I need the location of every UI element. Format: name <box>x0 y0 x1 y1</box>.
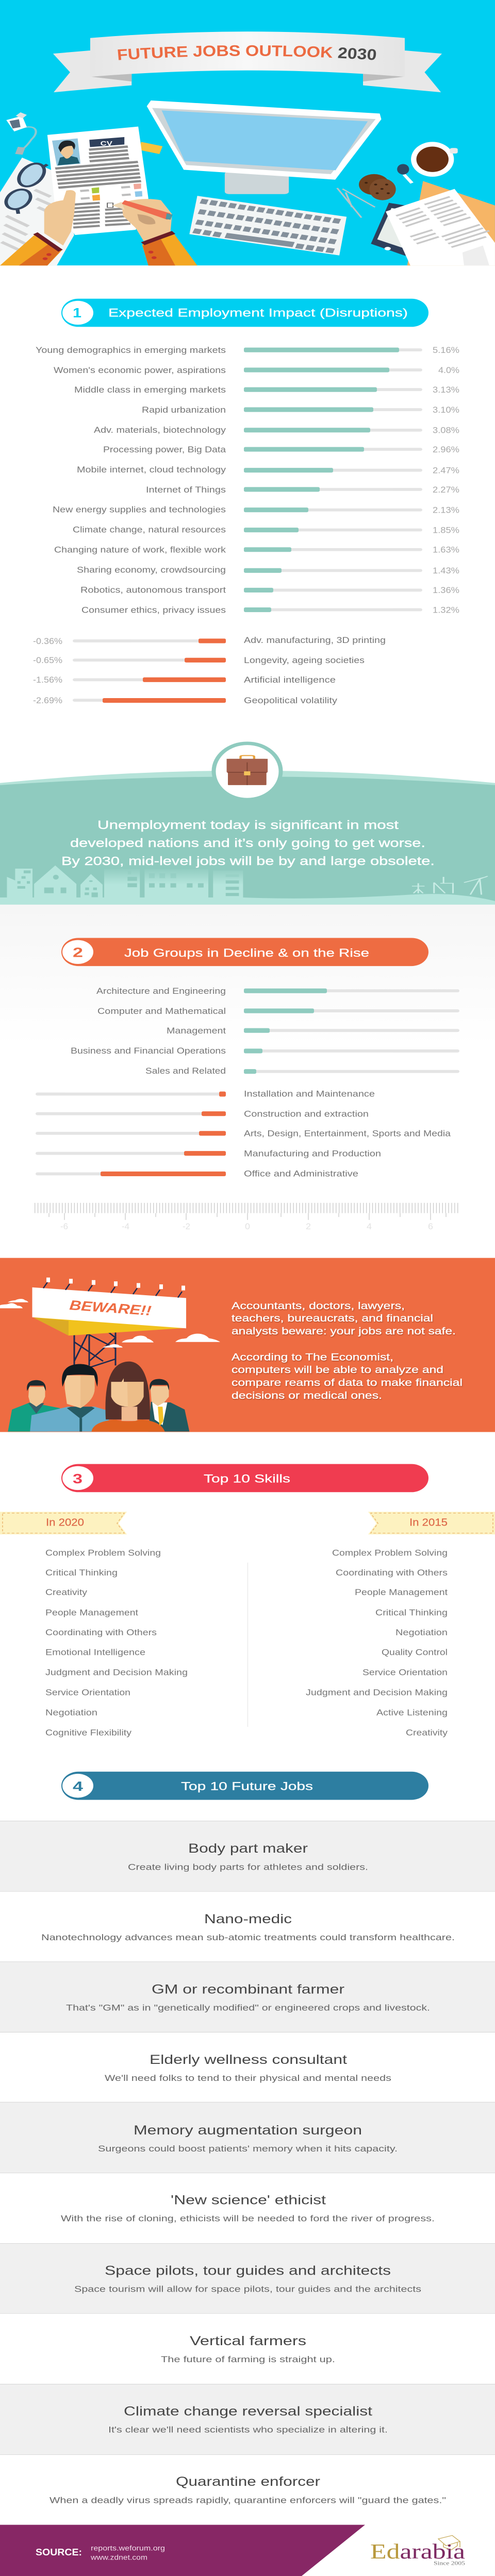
job row 3: That's "GM" as in "genetically modified" or engineered crops and livestock. <box>66 2003 430 2012</box>
bar chart: job groups in decline: Installation and Maintenance <box>244 1089 375 1098</box>
callout text: Unemployment today is significant in most <box>97 819 399 832</box>
panel: unemployment callout <box>0 741 495 905</box>
list: skills in 2020: Complex Problem Solving <box>45 1548 161 1557</box>
callout text: By 2030, mid-level jobs will be by and large obsolete. <box>61 855 435 868</box>
section heading 1: 1 <box>73 306 81 321</box>
icon: compass <box>337 188 375 217</box>
job row 2 <box>41 1911 455 1942</box>
beware text <box>232 1301 463 1401</box>
icon: CV sheet <box>47 127 148 235</box>
bar chart: negative disruptions: Longevity, ageing societies <box>244 655 365 665</box>
footer: sources: www.zdnet.com <box>90 2554 147 2562</box>
beware text: analysts beware: your jobs are not safe. <box>232 1326 456 1336</box>
beware text: Accountants, doctors, lawyers, <box>232 1301 405 1312</box>
list: skills in 2015 <box>306 1548 448 1737</box>
beware text: decisions or medical ones. <box>232 1391 382 1401</box>
bar chart: positive disruptions: Climate change, natural resources <box>73 524 226 534</box>
chart axis ruler <box>35 1208 459 1231</box>
banner tails <box>53 50 442 92</box>
bar chart: negative disruptions: Artificial intelligence <box>244 675 336 685</box>
chart axis ruler: -2 <box>183 1222 190 1231</box>
icon: coffee cup <box>411 142 458 177</box>
bar chart: positive disruptions: 1.32% <box>433 605 459 615</box>
bar chart: positive disruptions: 5.16% <box>433 345 459 355</box>
bar chart: positive disruptions <box>36 345 459 615</box>
list: skills in 2015: Active Listening <box>376 1707 448 1717</box>
job row 5: Surgeons could boost patients' memory when it hits capacity. <box>98 2144 398 2154</box>
job row 6: 'New science' ethicist <box>171 2193 326 2207</box>
bar chart: positive disruptions: Changing nature of work, flexible work <box>54 545 226 554</box>
bar chart: job groups in decline: Arts, Design, Entertainment, Sports and Media <box>244 1128 451 1138</box>
title: FUTURE JOBS OUTLOOK 2030 <box>118 45 376 60</box>
icon: glasses <box>2 162 49 214</box>
job row 3: GM or recombinant farmer <box>152 1982 344 1996</box>
bar chart: positive disruptions: 3.08% <box>433 425 459 435</box>
job row 9: It's clear we'll need scientists who specialize in altering it. <box>108 2425 388 2434</box>
illustration: town skyline <box>0 866 495 905</box>
section heading 3 <box>61 1464 428 1492</box>
job row 1: Create living body parts for athletes and soldiers. <box>128 1862 368 1872</box>
illustration: group of people <box>8 1362 189 1432</box>
bar chart: positive disruptions: 4.0% <box>438 365 459 375</box>
ribbon: in 2020: In 2020 <box>46 1517 84 1528</box>
logo: Edarabia: Edarabia <box>370 2539 465 2563</box>
ribbon: in 2015 <box>368 1512 495 1534</box>
chart axis ruler: 2 <box>306 1222 311 1231</box>
icon: folder <box>407 181 495 265</box>
bar chart: positive disruptions: Middle class in emerging markets <box>74 385 226 395</box>
bar chart: positive disruptions: 2.47% <box>433 465 459 475</box>
job row 2: Nanotechnology advances mean sub-atomic treatments could transform healthcare. <box>41 1933 455 1942</box>
section heading 2: Job Groups in Decline & on the Rise <box>124 947 369 959</box>
list: skills in 2015: Creativity <box>406 1727 448 1737</box>
icon: ruler <box>140 142 162 154</box>
bar chart: positive disruptions: Sharing economy, crowdsourcing <box>77 565 226 574</box>
bar chart: job groups on the rise: Computer and Mathematical <box>97 1006 226 1015</box>
footer: sources: reports.weforum.org <box>91 2545 165 2552</box>
job row 8: Vertical farmers <box>190 2333 306 2348</box>
list: skills in 2015: Judgment and Decision Making <box>306 1687 448 1697</box>
ribbon: in 2015: In 2015 <box>409 1517 448 1528</box>
job row 7 <box>0 2243 495 2313</box>
job row 5: Memory augmentation surgeon <box>134 2123 362 2137</box>
beware text: teachers, bureaucrats, and financial <box>232 1313 433 1324</box>
bar chart: positive disruptions: 2.27% <box>433 484 459 494</box>
callout text <box>61 819 435 868</box>
list: skills in 2015: Complex Problem Solving <box>332 1548 448 1557</box>
job row 6 <box>61 2193 435 2223</box>
illustration: billboard <box>0 1278 220 1367</box>
section heading 1: Expected Employment Impact (Disruptions) <box>108 307 408 319</box>
job row 1: Body part maker <box>188 1841 308 1856</box>
job row 3 <box>0 1961 495 2032</box>
bar chart: positive disruptions: Adv. materials, biotechnology <box>94 425 226 434</box>
job row 10 <box>50 2475 446 2505</box>
bar chart: negative disruptions: -0.36% <box>33 636 62 646</box>
section heading 1 <box>61 299 428 327</box>
list: skills in 2020: Judgment and Decision Making <box>45 1667 188 1677</box>
job row 9: Climate change reversal specialist <box>124 2404 372 2418</box>
list: skills in 2015: Coordinating with Others <box>336 1567 448 1577</box>
job row 10: When a deadly virus spreads rapidly, quarantine enforcers will "guard the gates." <box>50 2495 446 2505</box>
icon: phone <box>371 203 410 256</box>
footer: sources <box>0 2525 365 2576</box>
bar chart: positive disruptions: 1.36% <box>433 585 459 595</box>
icon: right hand with pencil <box>112 199 197 265</box>
job row 5 <box>0 2102 495 2173</box>
bar chart: job groups on the rise: Management <box>167 1026 226 1036</box>
beware text: compare reams of data to make financial <box>232 1378 463 1388</box>
beware text: computers will be able to analyze and <box>232 1365 443 1376</box>
job row 6: With the rise of cloning, ethicists will be needed to ford the river of progress. <box>61 2213 435 2223</box>
list: skills in 2020: Service Orientation <box>45 1687 130 1697</box>
icon: left hand and sleeve <box>0 190 76 265</box>
job row 4: Elderly wellness consultant <box>150 2053 347 2067</box>
callout text: developed nations and it’s only going to get worse. <box>70 837 425 850</box>
list: skills in 2015: Service Orientation <box>362 1667 448 1677</box>
bar chart: positive disruptions: 2.96% <box>433 445 459 454</box>
hero panel: desk illustration <box>0 0 495 266</box>
list: skills in 2020: Critical Thinking <box>45 1567 118 1577</box>
icon: cookies <box>359 174 396 200</box>
chart axis ruler: 6 <box>428 1222 433 1231</box>
bar chart: positive disruptions: Rapid urbanization <box>142 405 226 415</box>
icon: CV sheet: CV <box>101 140 112 147</box>
bar chart: positive disruptions: Consumer ethics, privacy issues <box>81 605 226 615</box>
bar chart: positive disruptions: Processing power, Big Data <box>103 445 226 454</box>
list: skills in 2020: People Management <box>45 1607 138 1617</box>
bar chart: negative disruptions: -0.65% <box>33 655 62 665</box>
bar chart: job groups in decline: Construction and extraction <box>244 1109 369 1118</box>
icon: back papers <box>0 158 74 265</box>
job row 8: The future of farming is straight up. <box>161 2354 335 2364</box>
section heading 2 <box>61 938 428 966</box>
bar chart: negative disruptions: Geopolitical volatility <box>244 696 338 705</box>
section heading 4 <box>61 1772 428 1800</box>
bar chart: negative disruptions: Adv. manufacturing, 3D printing <box>244 635 386 645</box>
bar chart: negative disruptions: -1.56% <box>33 675 62 685</box>
section heading 2: 2 <box>73 945 83 960</box>
beware text: According to The Economist, <box>232 1352 393 1363</box>
job row 9 <box>0 2384 495 2454</box>
job row 1 <box>0 1821 495 1891</box>
list: skills in 2015: Quality Control <box>382 1647 448 1657</box>
icon: key <box>397 164 414 184</box>
bar chart: negative disruptions <box>33 635 386 705</box>
bar chart: positive disruptions: Women's economic power, aspirations <box>54 365 226 375</box>
icon: briefcase <box>227 756 268 785</box>
bar chart: positive disruptions: 1.43% <box>433 566 459 575</box>
bar chart: positive disruptions: 3.10% <box>433 405 459 415</box>
icon: newspaper <box>386 189 495 265</box>
bar chart: positive disruptions: New energy supplies and technologies <box>53 504 226 514</box>
chart axis ruler: -4 <box>122 1222 129 1231</box>
list: skills in 2020: Creativity <box>45 1587 88 1597</box>
bar chart: negative disruptions: -2.69% <box>33 696 62 705</box>
illustration: billboard: BEWARE!! <box>69 1297 152 1319</box>
bar chart: job groups on the rise: Architecture and Engineering <box>96 986 226 996</box>
bar chart: job groups in decline: Office and Administrative <box>244 1168 358 1178</box>
list: skills in 2015: Negotiation <box>395 1627 448 1637</box>
bar chart: positive disruptions: Internet of Things <box>146 484 226 494</box>
list: skills in 2020 <box>45 1548 188 1737</box>
list: skills in 2020: Negotiation <box>45 1707 97 1717</box>
bar chart: job groups on the rise: Sales and Related <box>145 1065 226 1075</box>
section heading 3: Top 10 Skills <box>204 1472 290 1485</box>
icon: monitor <box>147 100 382 194</box>
ribbon: in 2020 <box>0 1512 127 1534</box>
job row 7: Space pilots, tour guides and architects <box>105 2263 391 2278</box>
icon: keyboard <box>189 196 346 256</box>
job row 4: We'll need folks to tend to their physical and mental needs <box>105 2073 391 2083</box>
bar chart: positive disruptions: Young demographics in emerging markets <box>36 345 226 355</box>
chart axis ruler: 4 <box>367 1222 372 1231</box>
section heading 4: Top 10 Future Jobs <box>181 1780 313 1793</box>
bar chart: positive disruptions: 1.85% <box>433 525 459 535</box>
bar chart: positive disruptions: Mobile internet, cloud technology <box>77 465 226 474</box>
list: skills in 2020: Cognitive Flexibility <box>45 1727 132 1737</box>
footer: sources: SOURCE: <box>36 2548 82 2558</box>
job row 8 <box>161 2333 335 2364</box>
logo: Edarabia: Since 2005 <box>434 2560 465 2566</box>
bar chart: job groups on the rise <box>71 986 459 1075</box>
job row 4 <box>105 2053 391 2083</box>
chart axis ruler: 0 <box>245 1222 250 1231</box>
icon: USB cable <box>6 112 36 155</box>
job row 2: Nano-medic <box>204 1911 292 1926</box>
list: skills in 2015: Critical Thinking <box>375 1607 448 1617</box>
panel: section 2 background <box>0 905 495 1045</box>
section heading 3: 3 <box>73 1471 82 1486</box>
bar chart: job groups in decline: Manufacturing and Production <box>244 1148 381 1158</box>
bar chart: positive disruptions: 1.63% <box>433 545 459 554</box>
chart axis ruler: -6 <box>60 1222 68 1231</box>
job row 7: Space tourism will allow for space pilots, tour guides and the architects <box>74 2284 421 2294</box>
job row 10: Quarantine enforcer <box>176 2475 320 2489</box>
bar chart: positive disruptions: 2.13% <box>433 505 459 515</box>
bar chart: positive disruptions: Robotics, autonomous transport <box>80 585 226 595</box>
bar chart: job groups on the rise: Business and Financial Operations <box>71 1046 226 1055</box>
list: skills in 2020: Coordinating with Others <box>45 1627 157 1637</box>
list: skills in 2015: People Management <box>355 1587 448 1597</box>
title banner <box>90 31 405 77</box>
panel: beware <box>0 1258 495 1432</box>
bar chart: job groups in decline <box>36 1089 451 1178</box>
list: skills in 2020: Emotional Intelligence <box>45 1647 145 1657</box>
section heading 4: 4 <box>73 1780 83 1794</box>
bar chart: positive disruptions: 3.13% <box>433 385 459 395</box>
